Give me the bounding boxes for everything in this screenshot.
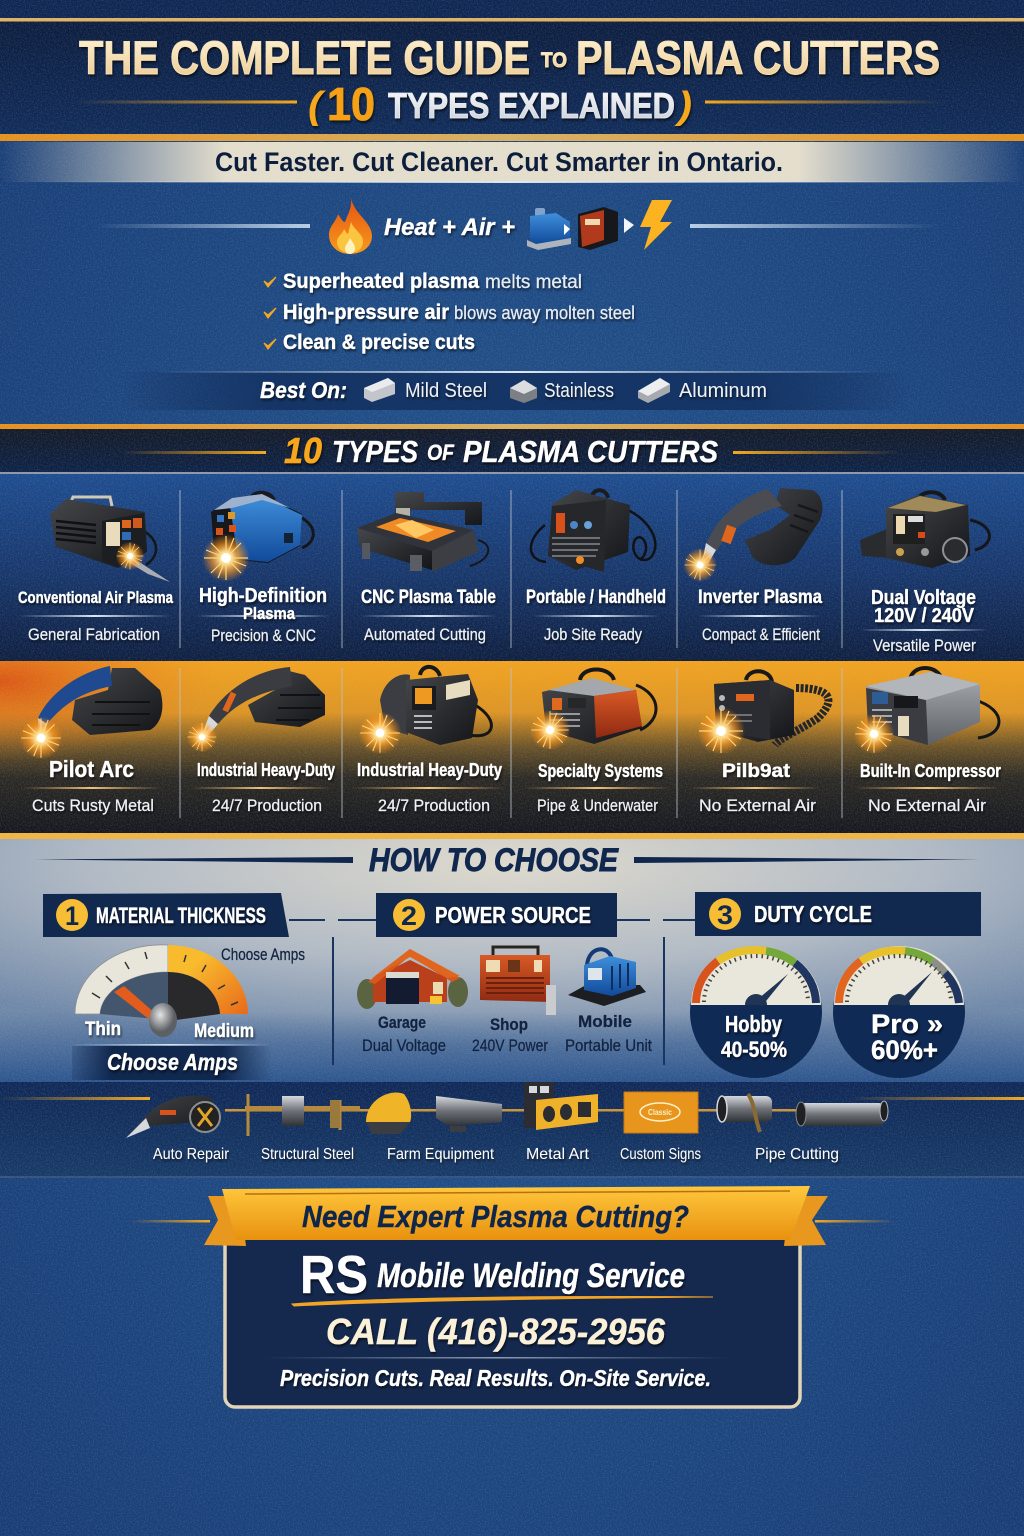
key benefits list	[264, 270, 635, 354]
dial: pro: 60%+	[871, 1035, 938, 1065]
card: conventional air plasma	[18, 497, 173, 644]
best on materials strip: Mild Steel	[405, 380, 487, 402]
application: auto repair	[126, 1096, 230, 1163]
company name: Mobile Welding Service	[377, 1257, 685, 1295]
card: dual voltage: 120V / 240V	[874, 605, 975, 627]
card: industrial heavy-duty machine: Industrial Heay-Duty	[357, 760, 502, 780]
card: pilot arc machine (garbled label): Pilb9at	[722, 761, 791, 782]
heading: how to choose	[35, 842, 980, 878]
applications band background	[0, 1082, 1024, 1178]
underline swoosh	[292, 1297, 713, 1306]
icon: portable machine	[531, 490, 655, 572]
header band background	[0, 0, 1024, 141]
card: cnc plasma table: CNC Plasma Table	[361, 587, 496, 608]
icon: CNC table	[357, 492, 488, 572]
best on materials strip: Aluminum	[679, 380, 767, 402]
icon: inverter torch	[683, 488, 822, 582]
card: pilot arc: Pilot Arc	[49, 756, 134, 782]
subtitle: )	[674, 85, 692, 127]
contact panel	[204, 1186, 828, 1407]
how to choose background	[0, 833, 1024, 1085]
benefit two: High-pressure air	[283, 301, 449, 324]
applications strip	[126, 1082, 888, 1163]
ribbon: Need Expert Plasma Cutting?	[302, 1199, 689, 1234]
step 2: power source: Portable Unit	[565, 1036, 652, 1055]
dial: hobby	[690, 946, 822, 1078]
icon: dual voltage machine	[860, 492, 989, 568]
benefit two: blows away molten steel	[454, 303, 635, 323]
benefit one: Superheated plasma	[283, 270, 479, 293]
icon: flame	[329, 198, 372, 254]
icon: blue HD machine	[202, 493, 313, 582]
card: high definition plasma	[195, 493, 331, 645]
icon: shop generator	[480, 947, 556, 1015]
card: specialty systems	[524, 670, 670, 815]
icon: compressor machine	[854, 668, 999, 754]
application: custom signs: Custom Signs	[620, 1146, 701, 1163]
application: pipe cutting: Pipe Cutting	[755, 1146, 839, 1163]
step header: POWER SOURCE	[435, 902, 591, 928]
application: farm equipment	[366, 1092, 502, 1163]
step 2: power source: Mobile	[578, 1012, 632, 1031]
card: inverter plasma	[683, 488, 822, 644]
types section heading band	[0, 424, 1024, 474]
step 2: power source: Garage	[378, 1013, 426, 1032]
best on materials strip: Stainless	[544, 380, 614, 402]
step header: 3	[717, 900, 733, 930]
application: metal art: Metal Art	[526, 1146, 590, 1163]
card: conventional air plasma: Conventional Air Plasma	[18, 588, 173, 607]
ribbon side lines	[130, 1220, 895, 1222]
step header	[695, 892, 981, 936]
column dividers	[180, 490, 842, 818]
card: built-in compressor: No External Air	[868, 796, 986, 815]
card: industrial heavy-duty machine	[352, 667, 505, 815]
how plasma works formula	[95, 198, 940, 254]
heading: 10 types of plasma cutters: 10	[284, 430, 322, 471]
heading: how to choose: HOW TO CHOOSE	[369, 842, 619, 878]
application: custom signs	[620, 1092, 701, 1163]
step header: 1	[65, 901, 79, 931]
card: industrial heavy-duty torch	[186, 667, 335, 815]
application: structural steel	[245, 1094, 360, 1163]
benefit one: melts metal	[485, 272, 582, 293]
dial: pro: Pro »	[871, 1009, 943, 1039]
icon: conventional machine	[50, 497, 170, 582]
application: metal art	[524, 1082, 598, 1163]
card: high definition plasma: Precision & CNC	[211, 626, 316, 645]
step 1: material thickness: Thin	[85, 1019, 121, 1040]
card: cnc plasma table: Automated Cutting	[364, 625, 486, 644]
icon: stainless block	[510, 380, 537, 403]
dial: pro	[833, 946, 965, 1078]
best on materials strip	[120, 371, 910, 410]
card: dual voltage: Versatile Power	[873, 636, 976, 655]
amp gauge	[75, 945, 248, 1037]
card: specialty systems: Specialty Systems	[538, 761, 663, 781]
card: specialty systems: Pipe & Underwater	[537, 796, 658, 815]
step header: DUTY CYCLE	[754, 901, 872, 927]
card: pilot arc machine (garbled label)	[690, 671, 828, 815]
icon: heavy-duty machine	[358, 667, 491, 755]
amps result band	[70, 1044, 272, 1080]
card: pilot arc machine (garbled label): No External Air	[699, 796, 816, 815]
icon: aluminum block	[638, 378, 670, 403]
card: cnc plasma table	[357, 492, 497, 644]
title: THE COMPLETE GUIDE	[79, 31, 530, 84]
title: PLASMA CUTTERS	[576, 31, 940, 84]
icon: garage	[357, 949, 468, 1009]
closing line: Precision Cuts. Real Results. On-Site Service.	[280, 1365, 711, 1391]
subtitle	[75, 78, 945, 130]
heading: 10 types of plasma cutters: OF	[427, 440, 454, 465]
icon: specialty machine	[530, 670, 656, 750]
subtitle: (	[308, 85, 327, 127]
heading: 10 types of plasma cutters: PLASMA CUTTERS	[463, 434, 718, 469]
tagline: Cut Faster. Cut Cleaner. Cut Smarter in Ontario.	[215, 147, 783, 177]
benefit two	[264, 301, 635, 324]
step header: 2	[401, 901, 417, 931]
icon: power unit	[578, 207, 634, 250]
call to action	[130, 1186, 895, 1407]
row two background	[0, 661, 1024, 833]
card: high definition plasma: High-Definition	[199, 585, 327, 607]
card: inverter plasma: Compact & Efficient	[702, 625, 820, 644]
subtitle: TYPES EXPLAINED	[388, 85, 675, 126]
benefit one	[264, 270, 582, 293]
card: pilot arc: Cuts Rusty Metal	[32, 796, 154, 815]
card: high definition plasma: Plasma	[243, 604, 295, 623]
icon: air compressor	[527, 208, 571, 250]
card: industrial heavy-duty torch: Industrial Heavy-Duty	[197, 760, 335, 780]
icon: pilot arc torch	[19, 666, 162, 760]
step 1: material thickness: Medium	[194, 1021, 254, 1042]
step header	[376, 893, 617, 937]
step 3: duty cycle	[690, 892, 981, 1078]
title: TO	[541, 49, 567, 72]
subtitle: 10	[327, 78, 375, 130]
application: custom signs: Classic	[648, 1108, 672, 1117]
icon: lightning bolt	[640, 200, 672, 250]
benefit three: Clean & precise cuts	[283, 331, 475, 354]
company name: RS	[300, 1245, 368, 1305]
phone number: CALL (416)-825-2956	[326, 1311, 666, 1352]
card: portable handheld: Job Site Ready	[544, 625, 642, 644]
best on materials strip: Best On:	[260, 377, 347, 403]
card: conventional air plasma: General Fabrication	[28, 625, 160, 644]
card: portable handheld: Portable / Handheld	[526, 587, 666, 608]
dial: hobby: 40-50%	[721, 1037, 787, 1062]
application: auto repair: Auto Repair	[153, 1146, 230, 1163]
icon: mobile unit	[568, 949, 646, 1006]
icon: mild steel block	[364, 378, 395, 402]
ribbon	[204, 1186, 828, 1246]
step 1: material thickness: Choose Amps	[221, 945, 305, 964]
icon: pilot machine with hose	[697, 671, 828, 755]
connectors and column rules	[289, 920, 695, 1065]
card: inverter plasma: Inverter Plasma	[698, 587, 822, 608]
dial: hobby: Hobby	[725, 1011, 782, 1037]
icon: heavy-duty torch	[186, 667, 325, 753]
heading: 10 types of plasma cutters: TYPES	[332, 434, 418, 469]
heading: 10 types of plasma cutters	[120, 430, 900, 471]
card: pilot arc	[19, 666, 162, 815]
row one background	[0, 474, 1024, 661]
card: industrial heavy-duty torch: 24/7 Production	[212, 796, 322, 815]
formula text: Heat + Air +	[384, 214, 515, 241]
card: dual voltage	[860, 492, 989, 655]
application: farm equipment: Farm Equipment	[387, 1146, 495, 1163]
card: built-in compressor	[854, 668, 1001, 815]
step 2: power source: Dual Voltage	[362, 1036, 446, 1055]
application: pipe cutting	[717, 1094, 888, 1163]
step 2: power source: Shop	[490, 1015, 528, 1034]
step 1: material thickness	[43, 893, 305, 1080]
card: portable handheld	[526, 490, 666, 644]
amps result band: Choose Amps	[107, 1049, 238, 1075]
card: dual voltage: Dual Voltage	[871, 587, 976, 609]
application: structural steel: Structural Steel	[261, 1146, 354, 1163]
step 2: power source	[357, 893, 652, 1055]
tagline band background	[0, 142, 1024, 182]
step header: MATERIAL THICKNESS	[96, 903, 266, 928]
step header	[43, 893, 289, 937]
title	[79, 31, 940, 84]
step 2: power source: 240V Power	[472, 1036, 548, 1055]
company name	[300, 1245, 685, 1305]
card: industrial heavy-duty machine: 24/7 Production	[378, 796, 490, 815]
